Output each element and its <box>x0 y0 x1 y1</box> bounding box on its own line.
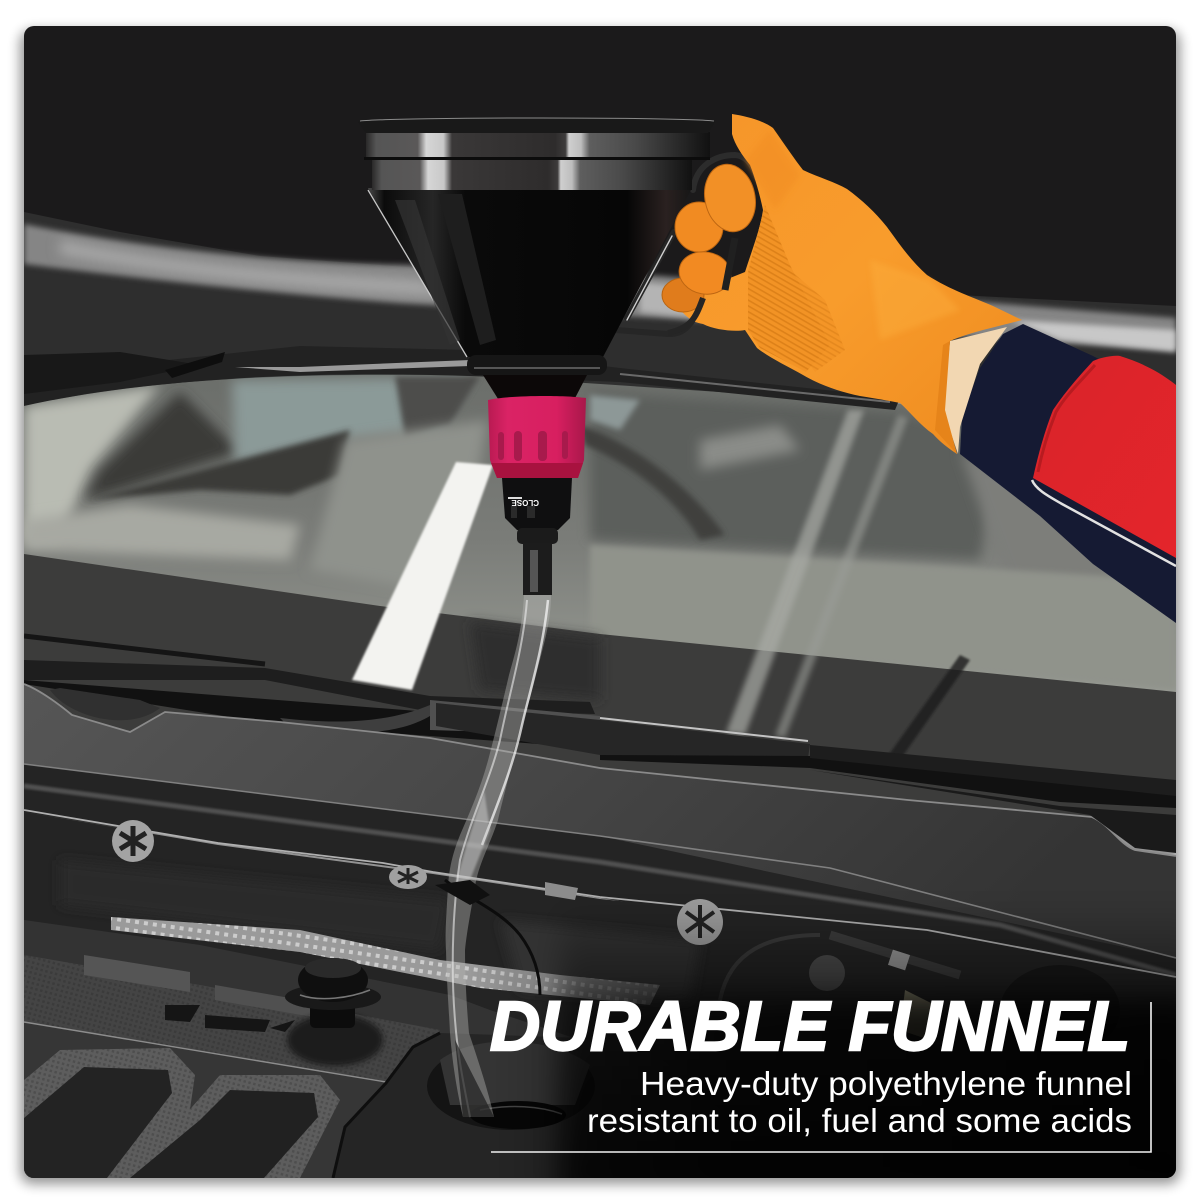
funnel handle <box>616 155 757 334</box>
cowl panel <box>24 684 1176 960</box>
handle grip behind fingers <box>725 238 735 290</box>
wiper arm right <box>436 703 1176 808</box>
rubber strips <box>24 764 1176 985</box>
glove pinky finger <box>662 278 704 312</box>
funnel <box>358 118 757 595</box>
glass reflection: teal area <box>232 376 470 465</box>
engine cover <box>24 920 563 1178</box>
engine right side hoses <box>718 931 1075 1038</box>
oil filler cap <box>285 958 383 1066</box>
glove shading <box>870 260 960 340</box>
caption <box>490 987 1151 1152</box>
caption corner bracket <box>491 1002 1151 1152</box>
funnel rim <box>366 132 688 133</box>
caption line one: Heavy-duty polyethylene funnel <box>640 1065 1132 1102</box>
engine bay <box>24 812 1176 1178</box>
engine bay fastener clips <box>112 820 723 945</box>
glove middle finger <box>675 202 723 252</box>
background: windshield seal <box>24 346 900 410</box>
pink collar <box>488 396 586 478</box>
dark caption overlay <box>536 908 1176 1178</box>
valve label: CLOSE <box>511 498 539 507</box>
cover recess 2 <box>130 1090 318 1178</box>
glove textured grip <box>748 205 830 372</box>
funnel neck <box>483 375 587 402</box>
glass reflection: light left area <box>24 385 160 545</box>
hose connector <box>523 543 552 595</box>
valve body <box>502 478 572 544</box>
background: silver hood edge <box>24 212 1176 400</box>
red sleeve panel <box>1033 356 1176 558</box>
metal clip on strip <box>545 882 578 900</box>
wiper arm left <box>24 636 620 750</box>
wrist skin <box>943 327 1007 454</box>
lower dark band of windshield <box>24 554 1176 830</box>
background: windshield glass <box>24 375 1176 830</box>
thin reflection streaks <box>726 410 864 735</box>
white reflection streak <box>352 462 493 690</box>
glass reflection: right dark interior <box>590 392 1000 560</box>
clear hose <box>435 595 551 1117</box>
glove back of hand <box>675 114 1022 454</box>
funnel upper band <box>372 160 692 190</box>
funnel middle band <box>366 132 710 157</box>
cover light textured pads <box>24 1048 195 1178</box>
navy cuff and sleeve <box>960 324 1176 623</box>
funnel cone <box>368 188 692 357</box>
glove index finger <box>698 160 762 236</box>
cover recess 1 <box>24 1067 172 1178</box>
glass reflection: pale lower <box>24 505 300 560</box>
glass reflection: dark dash <box>90 430 350 500</box>
heat shield foil strip <box>111 917 660 1005</box>
cover raised bars <box>84 955 190 992</box>
background: dark hood lining <box>24 26 1176 306</box>
arm sleeve <box>960 324 1176 623</box>
glove ring finger <box>676 248 734 298</box>
badge on cover <box>165 1005 295 1032</box>
caption title: DURABLE FUNNEL <box>490 987 1130 1065</box>
white piping <box>1032 480 1176 566</box>
caption line two: resistant to oil, fuel and some acids <box>587 1102 1132 1139</box>
glass reflection: dark seat <box>84 392 240 500</box>
orange glove <box>662 114 1022 454</box>
oil filler surround and hole <box>332 1032 594 1178</box>
funnel lower collar <box>467 355 607 375</box>
